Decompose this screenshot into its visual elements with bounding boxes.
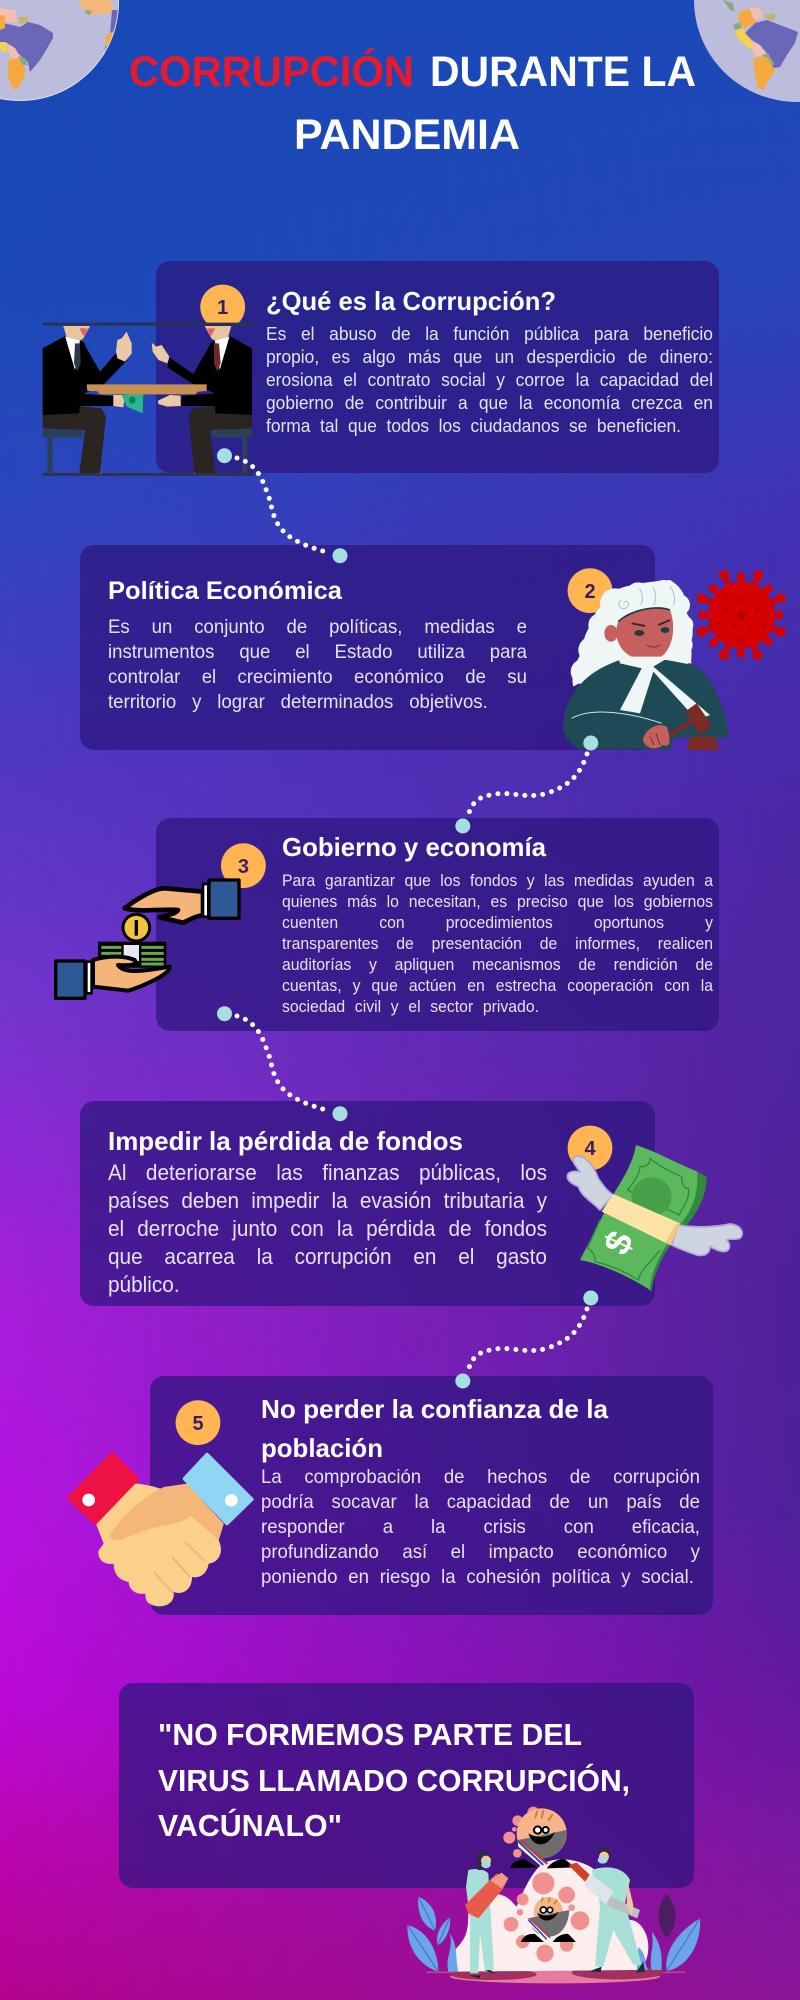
text: cita final: VIRUS LLAMADO CORRUPCIÓN,	[158, 1762, 630, 1798]
text: propio, es algo más que un desperdicio de dinero:	[266, 346, 713, 367]
illustration: flying banknote	[566, 1145, 744, 1292]
number badge 5	[176, 1400, 220, 1446]
text: Es el abuso de la función pública para beneficio	[266, 323, 713, 344]
connector: paso 4 a 5	[455, 1290, 598, 1388]
text: el derroche junto con la pérdida de fondos	[108, 1216, 547, 1241]
illustration: handshake	[66, 1452, 254, 1606]
number badge 3: 3	[238, 856, 249, 878]
panel: impedir la pérdida de fondos	[80, 1101, 655, 1306]
text: controlar el crecimiento económico de su	[108, 666, 527, 688]
text: población	[261, 1433, 383, 1463]
text: ¿Qué es la Corrupción?	[266, 286, 556, 316]
text: Gobierno y economía	[282, 832, 547, 862]
globe: top left	[0, 0, 119, 101]
text: responder a la crisis con eficacia,	[261, 1516, 700, 1538]
text: erosiona el contrato social y corroe la capacidad del	[266, 369, 713, 390]
number badge 3	[221, 843, 266, 888]
text: que acarrea la corrupción en el gasto	[108, 1244, 547, 1269]
panel: política económica	[80, 545, 655, 750]
panel: no perder la confianza	[150, 1376, 713, 1615]
text: cuenten con procedimientos oportunos y	[282, 913, 713, 932]
text: Política Económica	[108, 577, 343, 605]
text: cita final: "NO FORMEMOS PARTE DEL	[158, 1717, 582, 1752]
character: large corrupt virus	[510, 1808, 575, 1868]
character: nurse with bottle	[465, 1852, 508, 1979]
text: qué es la corrupción	[266, 286, 713, 436]
text: Al deteriorarse las finanzas públicas, los	[108, 1160, 547, 1185]
text: público.	[108, 1272, 180, 1297]
text: auditorías y apliquen mecanismos de rendición de	[282, 955, 713, 974]
text: Para garantizar que los fondos y las medidas ayuden a	[282, 871, 713, 890]
text: cita final	[158, 1717, 630, 1843]
text: profundizando así el impacto económico y	[261, 1541, 700, 1563]
text: Impedir la pérdida de fondos	[108, 1126, 463, 1156]
illustration: flying banknote: $	[596, 1225, 641, 1261]
text: impedir la pérdida de fondos	[108, 1126, 547, 1297]
text: transparentes de presentación de informes, realicen	[282, 934, 713, 953]
globe: top right	[694, 0, 800, 102]
number badge 1: 1	[217, 297, 228, 319]
text: cita final: 6	[584, 1722, 595, 1744]
number badge 1	[200, 284, 246, 323]
text: gobierno y economía	[282, 832, 714, 1016]
character: small corrupt virus	[521, 1897, 576, 1942]
text: No perder la confianza de la	[261, 1394, 609, 1424]
connector: paso 1 a 2	[217, 448, 348, 564]
number badge 4: 4	[584, 1138, 596, 1160]
text: cita final: VACÚNALO"	[158, 1807, 342, 1843]
text: podría socavar la capacidad de un país de	[261, 1491, 700, 1513]
text: quienes más lo necesitan, es preciso que los gobiernos	[282, 892, 713, 911]
text: cuentas, y que actúen en estrecha cooperación con la	[282, 976, 713, 995]
number badge 4	[568, 1126, 612, 1170]
text: países deben impedir la evasión tributaria y	[108, 1188, 547, 1213]
text: política económica	[108, 577, 527, 713]
text: forma tal que todos los ciudadanos se beneficien.	[266, 415, 681, 436]
illustration: businessmen exchanging money	[42, 322, 254, 476]
text: La comprobación de hechos de corrupción	[261, 1466, 700, 1488]
text: territorio y lograr determinados objetivos.	[108, 691, 488, 713]
icon: virus	[696, 570, 786, 660]
connector: paso 2 a 3	[455, 736, 598, 834]
text: no perder la confianza	[261, 1394, 700, 1588]
number badge 2	[568, 568, 612, 614]
title: DURANTE LA	[430, 48, 696, 96]
illustration: judge with gavel	[563, 580, 728, 750]
text: sociedad civil y el sector privado.	[282, 997, 539, 1016]
panel: qué es la corrupción	[156, 261, 719, 473]
title: CORRUPCIÓN	[129, 47, 414, 96]
connector: paso 3 a 4	[217, 1006, 348, 1122]
text: poniendo en riesgo la cohesión política y social.	[261, 1566, 694, 1588]
title	[129, 47, 696, 159]
number badge 2: 2	[584, 581, 596, 603]
text: Es un conjunto de políticas, medidas e	[108, 616, 527, 638]
title: PANDEMIA	[294, 111, 520, 159]
text: gobierno de contribuir a que la economía crezca en	[266, 392, 713, 413]
number badge 5: 5	[192, 1413, 204, 1435]
text: instrumentos que el Estado utiliza para	[108, 641, 527, 663]
character: doctor with syringe	[568, 1847, 645, 1973]
illustration: hands passing money	[54, 878, 241, 1000]
panel: cita final	[119, 1683, 694, 1888]
illustration: doctors vaccinating the corruption virus	[407, 1806, 700, 1984]
panel: gobierno y economía	[156, 818, 719, 1031]
